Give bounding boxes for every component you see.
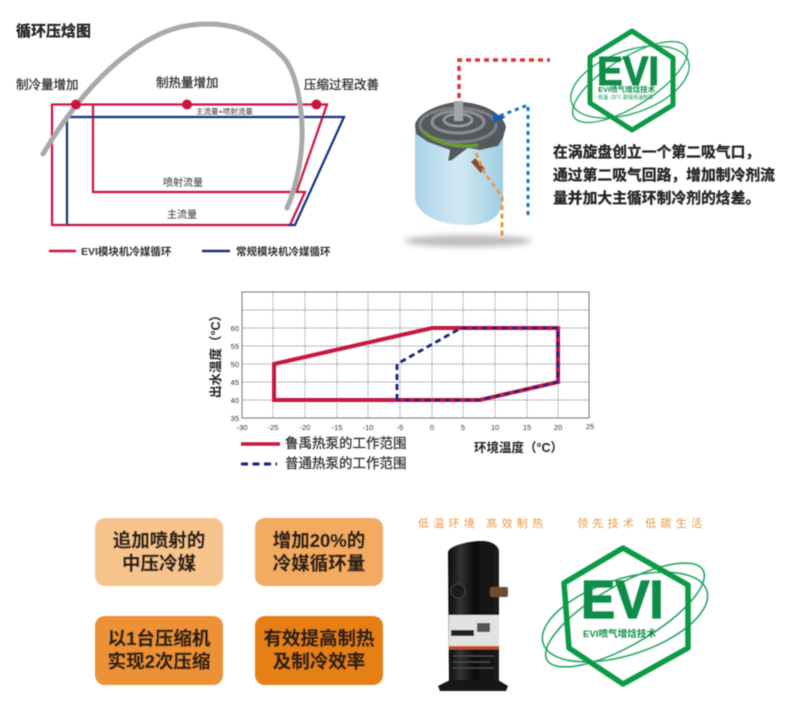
lower shell print bbox=[453, 656, 494, 668]
blue arrowhead bbox=[492, 113, 506, 124]
shell bbox=[448, 541, 499, 684]
hexagon bbox=[590, 31, 673, 130]
card: efficiency bbox=[255, 616, 383, 685]
logo: EVI large bbox=[531, 544, 719, 686]
injection fitting bbox=[473, 160, 483, 171]
front terminal bbox=[451, 584, 465, 598]
card: two-stage compression bbox=[95, 616, 223, 685]
legend: standard: 常规模块机冷媒循环 bbox=[236, 245, 331, 258]
legend: EVI: EVI模块机冷媒循环 bbox=[81, 245, 172, 258]
label: main plus injection flow: 主流量+喷射流量 bbox=[196, 106, 253, 116]
plot frame and grid bbox=[242, 292, 589, 418]
x axis ticks bbox=[237, 422, 594, 432]
chart: operating range bbox=[208, 292, 594, 471]
base plate bbox=[438, 680, 508, 691]
logo caption: EVI喷气增焓技术 bbox=[583, 628, 656, 640]
x axis ticks: 15 bbox=[523, 423, 531, 432]
EVI letters: EVI bbox=[581, 570, 664, 630]
slogan: leading tech: 领先技术 低碳生活 bbox=[577, 516, 702, 530]
x axis ticks: -10 bbox=[363, 423, 373, 432]
white label bbox=[449, 615, 499, 646]
illustration: compressor photo bbox=[438, 541, 508, 691]
x axis ticks: 5 bbox=[461, 423, 465, 432]
orbit rings bbox=[561, 27, 699, 137]
x axis ticks: 10 bbox=[491, 423, 499, 432]
ground shadow bbox=[404, 235, 532, 247]
title: 循环压焓图 bbox=[16, 22, 91, 40]
legend: blue: 普通热泵的工作范围 bbox=[285, 456, 406, 471]
y axis ticks: 40 bbox=[231, 396, 239, 405]
x axis ticks: -15 bbox=[332, 423, 342, 432]
saturation curve bbox=[43, 24, 302, 208]
feature cards bbox=[95, 518, 383, 685]
red range bbox=[274, 328, 558, 400]
card: 20 percent more: 冷媒循环量 bbox=[273, 553, 365, 574]
logo caption: EVI喷气增焓技术 bbox=[598, 84, 656, 94]
x axis ticks: -25 bbox=[268, 423, 278, 432]
legend: EVI bbox=[49, 245, 172, 258]
port: blue bbox=[497, 105, 528, 215]
card: efficiency: 有效提高制热 bbox=[263, 628, 375, 649]
card: two-stage compression: 实现2次压缩 bbox=[108, 651, 210, 672]
x axis ticks: -20 bbox=[300, 423, 310, 432]
card: 20 percent more bbox=[255, 518, 383, 586]
card: medium-pressure refrigerant bbox=[95, 518, 223, 586]
x axis title: 环境温度（°C） bbox=[474, 440, 563, 455]
y axis ticks: 60 bbox=[231, 324, 239, 333]
side port bbox=[490, 587, 508, 597]
card: medium-pressure refrigerant: 中压冷媒 bbox=[122, 553, 196, 574]
orange stripe bbox=[449, 646, 499, 650]
description text: 量并加大主循环制冷剂的焓差。 bbox=[553, 189, 760, 207]
scroll top bbox=[415, 102, 506, 161]
panel: pressure-enthalpy diagram bbox=[16, 22, 379, 258]
card: 20 percent more: 增加20%的 bbox=[273, 530, 365, 551]
cylinder body bbox=[415, 130, 503, 225]
y axis ticks: 55 bbox=[231, 342, 239, 351]
x axis ticks: -30 bbox=[237, 423, 247, 432]
cycle: standard blue bbox=[67, 117, 344, 225]
description text bbox=[553, 143, 775, 207]
y axis ticks: 45 bbox=[231, 378, 239, 387]
description text: 通过第二吸气回路，增加制冷剂流 bbox=[553, 166, 775, 184]
port: orange bbox=[476, 153, 502, 240]
cycle: EVI red bbox=[52, 104, 327, 225]
x axis ticks: 20 bbox=[554, 423, 562, 432]
label: cooling increase: 制冷量增加 bbox=[16, 77, 79, 92]
card: efficiency: 及制冷效率 bbox=[273, 651, 365, 672]
x axis ticks: 25 bbox=[586, 422, 594, 431]
illustration: scroll compressor cutaway bbox=[404, 60, 550, 247]
x axis ticks: 0 bbox=[430, 423, 434, 432]
hexagon bbox=[564, 548, 688, 684]
label: main flow: 主流量 bbox=[167, 208, 197, 221]
orbit rings bbox=[531, 544, 719, 686]
slogan: low temp: 低温环境 高效制热 bbox=[418, 516, 543, 530]
green injection channel bbox=[424, 132, 478, 146]
legend: red: 鲁禹热泵的工作范围 bbox=[285, 436, 406, 451]
label: heating increase: 制热量增加 bbox=[156, 75, 219, 90]
legend: standard bbox=[202, 245, 331, 258]
y axis title: 出水温度（°C） bbox=[208, 309, 223, 398]
y axis ticks: 35 bbox=[231, 414, 239, 423]
barcode block bbox=[477, 623, 490, 632]
x axis ticks: -5 bbox=[397, 423, 403, 432]
y axis ticks: 50 bbox=[231, 360, 239, 369]
card: medium-pressure refrigerant: 追加喷射的 bbox=[113, 530, 205, 551]
card: two-stage compression: 以1台压缩机 bbox=[108, 628, 211, 649]
label: compression improved: 压缩过程改善 bbox=[304, 77, 379, 92]
blue dashed range bbox=[397, 328, 558, 400]
description text: 在涡旋盘创立一个第二吸气口， bbox=[553, 143, 760, 161]
logo: EVI small bbox=[561, 27, 699, 137]
logo subcaption: 低温 -25℃ 超强低温制热 bbox=[598, 94, 653, 101]
black label block bbox=[451, 630, 474, 636]
y axis ticks bbox=[231, 324, 239, 423]
state points bbox=[71, 100, 322, 110]
label: injection flow: 喷射流量 bbox=[163, 176, 203, 189]
port: red bbox=[459, 60, 550, 98]
EVI letters: EVI bbox=[597, 49, 659, 94]
